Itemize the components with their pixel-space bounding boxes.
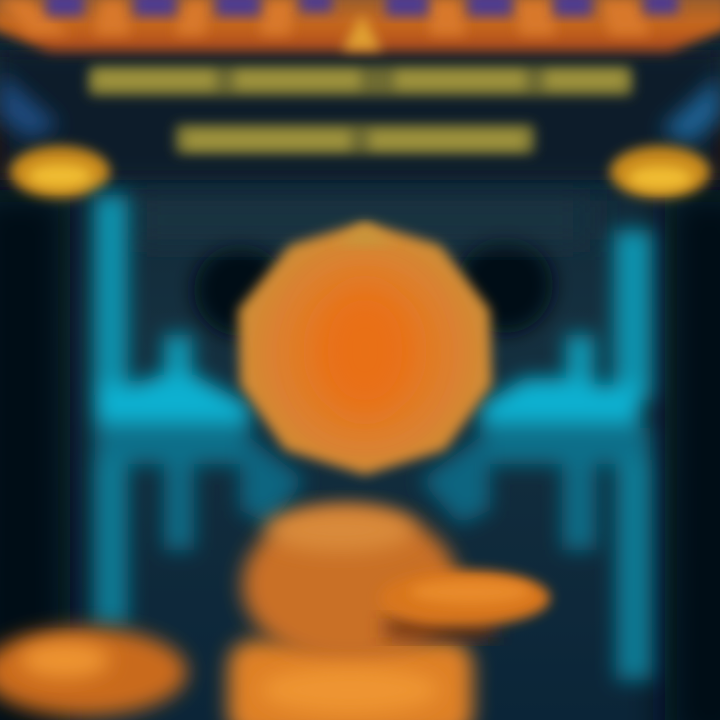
title: illegible blurred gold text lines [88, 66, 633, 154]
top orange roof band with purple windows [0, 0, 720, 52]
tilted coin on stack [380, 570, 550, 626]
lamp: left [10, 146, 110, 198]
cyan chart: left [94, 195, 305, 625]
lamp: right [610, 146, 710, 198]
central coin [238, 222, 492, 475]
cyan chart: right [420, 230, 652, 680]
lower coin stack [228, 507, 495, 720]
bottom-left coin [0, 628, 187, 716]
